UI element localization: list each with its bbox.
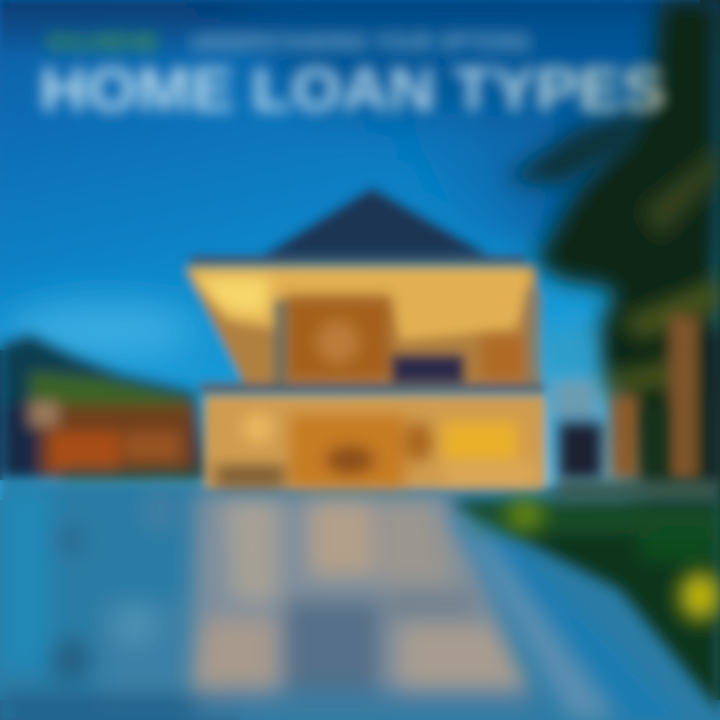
palm trees xyxy=(505,0,720,500)
floor band xyxy=(200,383,545,393)
building behind palms xyxy=(558,422,603,480)
lower floor xyxy=(205,396,545,488)
lawn xyxy=(450,499,720,712)
upper floor xyxy=(186,268,540,385)
heading: HOME LOAN TYPES xyxy=(40,56,665,123)
roof xyxy=(262,188,490,256)
olive fronds xyxy=(640,145,720,240)
ground pool and walkway xyxy=(0,486,720,720)
title xyxy=(40,29,665,123)
distant hills and houses xyxy=(0,335,210,482)
house xyxy=(186,188,545,488)
trunks xyxy=(610,395,640,480)
eyebrow text: GUIDE xyxy=(46,29,161,56)
walkway tiles xyxy=(190,492,535,720)
subtitle: UNDERSTANDING YOUR OPTIONS xyxy=(190,29,530,56)
walkway blue edge xyxy=(455,520,680,720)
